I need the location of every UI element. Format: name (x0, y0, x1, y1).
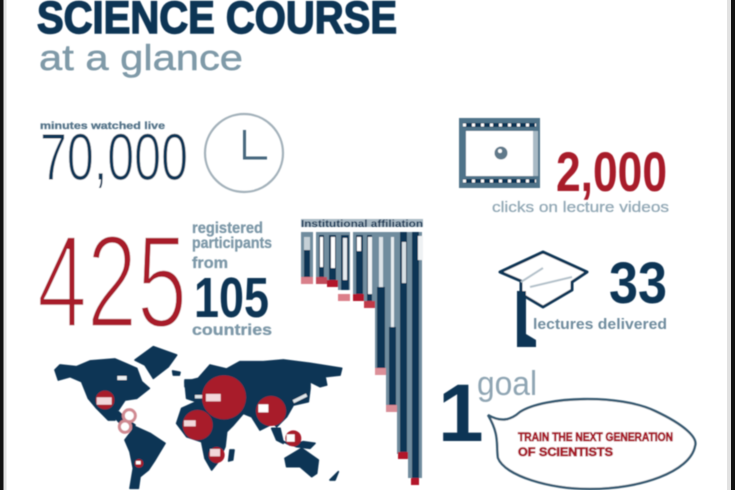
bar 10 (408, 232, 423, 485)
bar 4 (338, 232, 350, 301)
lake (117, 376, 127, 380)
continents: old world (177, 360, 342, 480)
chart header: Institutional affiliation (301, 219, 423, 230)
stat number: 33 (609, 251, 667, 316)
bubbles: Americas (96, 391, 143, 468)
bubble outline (488, 399, 695, 489)
label: registered participants from: registered (192, 220, 263, 237)
stat: 2,000 clicks (492, 140, 669, 216)
goal: number 1: 1 (438, 368, 484, 459)
bubble text (518, 430, 673, 459)
bubble text: OF SCIENTISTS (518, 445, 613, 459)
bar 1 (301, 232, 313, 284)
stat number: 70,000 (40, 120, 188, 195)
label: countries: countries (192, 322, 272, 339)
bar 6 (364, 232, 375, 308)
big number: 425 (37, 208, 187, 355)
subtitle: at a glance (39, 37, 243, 78)
bar chart: participant affiliations (301, 219, 423, 485)
sea gaps (195, 395, 307, 402)
bar 8 (386, 232, 397, 412)
stat: 70,000 minutes (40, 120, 188, 195)
stat label: clicks on lecture videos (492, 199, 669, 216)
bar 2 (316, 232, 327, 284)
bubble text: TRAIN THE NEXT GENERATION (518, 430, 673, 444)
goal: label: goal (477, 365, 537, 403)
bar 5 (353, 232, 364, 301)
stat: 425 participants (37, 208, 272, 355)
stat: 33 lectures (533, 251, 667, 333)
continents: Americas (55, 347, 180, 488)
icon: clock (205, 114, 283, 192)
label: registered participants from: participants (192, 235, 272, 252)
number: 105: 105 (194, 266, 269, 330)
map: Eurasia, Africa and Australia (177, 360, 342, 480)
icon: graduation cap (500, 252, 587, 347)
bar 9 (397, 232, 408, 459)
label: registered participants from: from (192, 255, 228, 272)
bubbles: old world (183, 375, 301, 463)
stat number: 2,000 (556, 140, 667, 203)
stat label: lectures delivered (533, 316, 667, 333)
bar 3 (327, 232, 338, 287)
bubble labels (184, 394, 295, 456)
icon: film strip (459, 118, 540, 188)
right border (727, 0, 735, 490)
label: registered participants from (192, 220, 272, 272)
map: Americas and Greenland (55, 347, 180, 488)
left border (0, 0, 6, 490)
world map with participant bubbles (55, 347, 342, 488)
stat label: minutes watched live (40, 121, 166, 132)
speech bubble (488, 399, 695, 489)
bar 7 (375, 232, 386, 375)
